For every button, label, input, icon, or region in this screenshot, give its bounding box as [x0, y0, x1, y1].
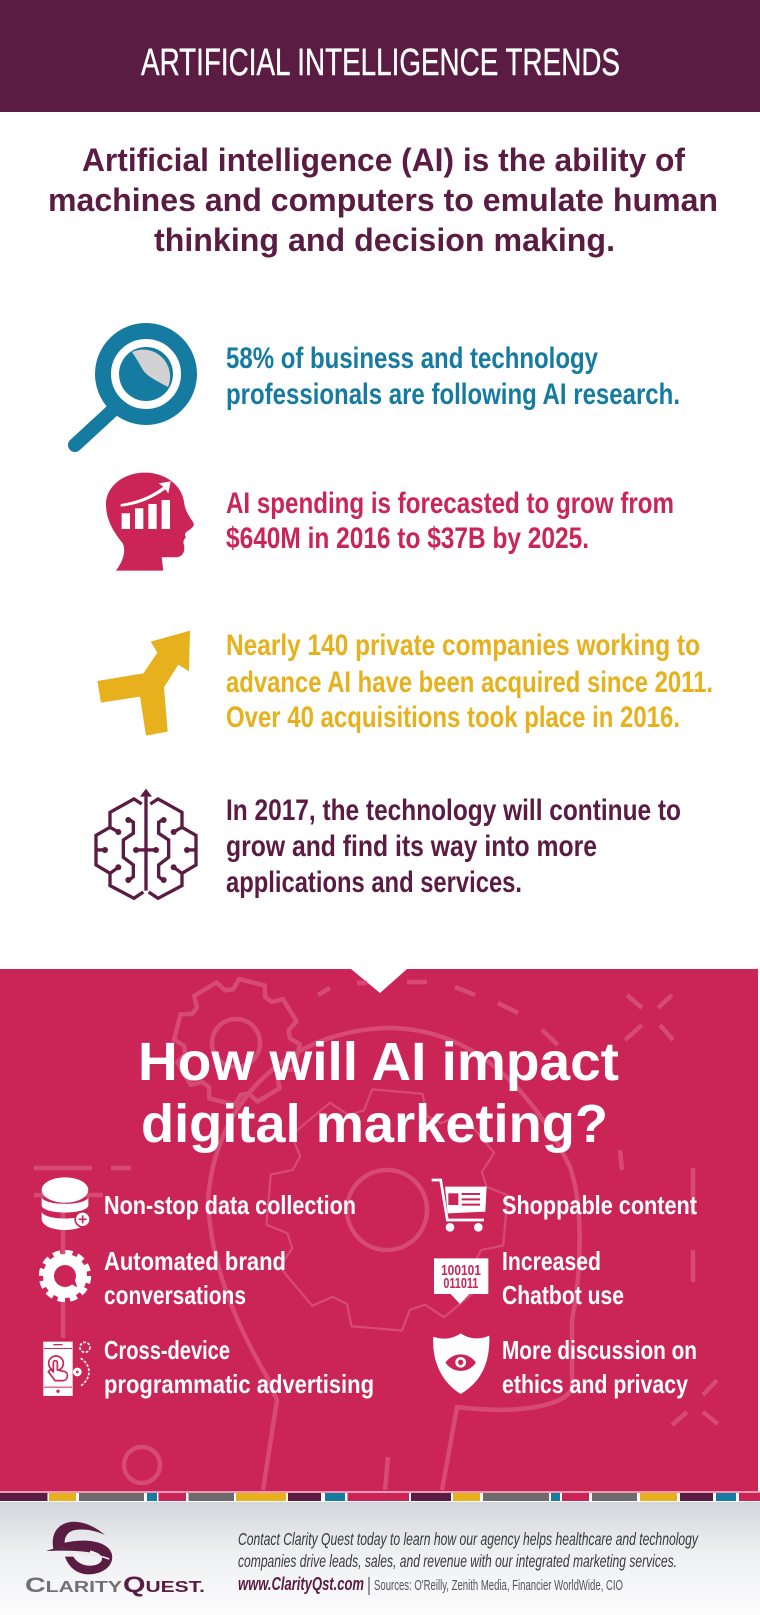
- intro text: machines and computers to emulate human: [48, 182, 718, 218]
- icon: binary speech bubble: [434, 1258, 488, 1304]
- icon: gear with speech bubble: [41, 1252, 89, 1300]
- icon: circuit brain: [96, 789, 196, 898]
- text: spending statistic: [226, 487, 674, 555]
- icon: binary speech bubble: 100101: [441, 1263, 481, 1279]
- text: research statistic: 58% of business and technology: [226, 342, 598, 375]
- label: Increased: [502, 1246, 601, 1276]
- icon: database: [42, 1177, 91, 1230]
- stat: acquisitions: [97, 629, 713, 736]
- logo: Clarity Quest: Q UEST.: [123, 1572, 205, 1597]
- label: Shoppable content: [502, 1190, 697, 1220]
- intro text: Artificial intelligence (AI) is the ability of: [82, 142, 685, 178]
- label: Cross-device: [104, 1335, 230, 1365]
- icon: binary speech bubble: 011011: [443, 1276, 478, 1292]
- icon: merging arrow: [97, 631, 190, 736]
- icon: shopping cart: [432, 1180, 487, 1232]
- label: Chatbot use: [502, 1280, 624, 1310]
- intro text: thinking and decision making.: [154, 222, 615, 258]
- label: ethics and privacy: [502, 1369, 688, 1399]
- icon: phone with gears: [43, 1342, 90, 1396]
- text: spending statistic: $640M in 2016 to $37B by 2025.: [226, 522, 589, 555]
- icon: head with growth chart: [106, 473, 194, 571]
- footer: [0, 1502, 760, 1615]
- stat: spending: [106, 473, 674, 571]
- heading: How will AI impact: [138, 1032, 619, 1092]
- header banner: [0, 0, 760, 112]
- label: conversations: [104, 1280, 246, 1310]
- label: Non-stop data collection: [104, 1190, 356, 1220]
- contact text: www.ClarityQst.com: [238, 1574, 364, 1594]
- panel: digital marketing impact: [0, 967, 758, 1491]
- logo swoosh mark: [46, 1522, 112, 1574]
- label: programmatic advertising: [104, 1369, 374, 1399]
- label: [502, 1335, 697, 1399]
- text: growth statement: applications and services.: [226, 866, 522, 899]
- item: chatbot use: [434, 1246, 624, 1310]
- stat: research: [75, 331, 680, 445]
- text: acquisitions statistic: [226, 629, 713, 734]
- item: data collection: [42, 1177, 356, 1230]
- label: More discussion on: [502, 1335, 697, 1365]
- text: growth statement: [226, 794, 681, 899]
- heading: [138, 1032, 619, 1154]
- item: cross-device advertising: [43, 1335, 374, 1399]
- background head and gears motif: [34, 967, 718, 1490]
- text: growth statement: grow and find its way into more: [226, 830, 597, 863]
- notch triangle: [351, 969, 407, 993]
- label: Automated brand: [104, 1246, 286, 1276]
- item: shoppable content: [432, 1180, 697, 1232]
- logo: Clarity Quest: [25, 1522, 205, 1597]
- item: ethics and privacy: [433, 1333, 697, 1399]
- stat: continued growth: [96, 789, 681, 899]
- text: research statistic: [226, 342, 680, 411]
- label: [104, 1335, 374, 1399]
- icon: magnifying glass: [75, 331, 189, 445]
- colour stripe divider: [0, 1491, 760, 1501]
- intro text: [48, 142, 718, 258]
- label: [104, 1246, 286, 1310]
- item: brand conversations: [41, 1246, 286, 1310]
- label: [502, 1246, 624, 1310]
- divider: [368, 1577, 370, 1595]
- contact text: [238, 1529, 699, 1594]
- sources: Sources: O'Reilly, Zenith Media, Financier WorldWide, CIO: [374, 1577, 623, 1594]
- icon: shield with eye: [433, 1333, 489, 1394]
- heading: digital marketing?: [141, 1094, 608, 1154]
- logo wordmark: C LARITY: [25, 1574, 123, 1597]
